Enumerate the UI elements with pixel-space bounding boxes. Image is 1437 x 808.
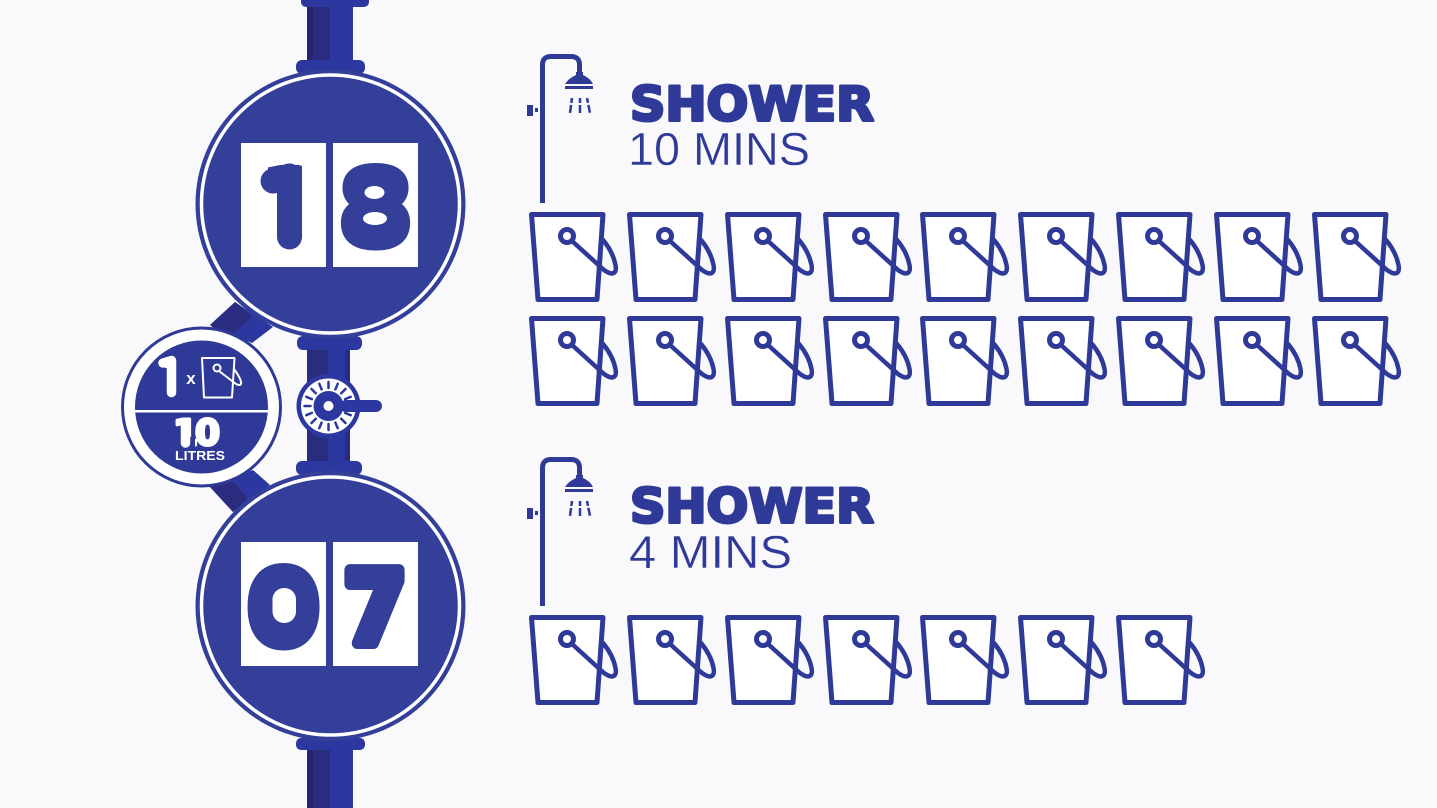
text: 10: 10 <box>173 413 219 454</box>
heading: shower 10 mins: SHOWER <box>630 78 874 132</box>
heading: shower 4 mins: SHOWER <box>630 480 874 534</box>
digit 7: 7 <box>344 552 406 667</box>
digit 1 <box>158 356 176 398</box>
text: litres: LITRES <box>175 448 225 463</box>
icon: shower head 4 mins <box>527 460 593 606</box>
panel: counter 07 <box>196 471 466 741</box>
chart: 7 buckets <box>532 618 1203 702</box>
digit 8: 8 <box>341 150 410 267</box>
panel: bucket equals 10 litres <box>121 326 282 488</box>
digit 1: 1 <box>252 151 322 268</box>
duration: 4 MINS <box>629 526 792 578</box>
multiply sign: x <box>186 369 196 388</box>
digit 1 <box>260 164 302 250</box>
heading: shower 4 mins <box>629 480 874 578</box>
pipe: diagonal lower connector <box>210 470 270 512</box>
text: 10 <box>176 417 220 448</box>
pipe: top vertical <box>296 0 369 74</box>
digit 1: 1 <box>157 352 183 405</box>
icon: shower head 10 mins <box>527 56 593 203</box>
pipe: bottom vertical <box>296 738 365 808</box>
duration: 10 MINS <box>628 123 810 175</box>
digit 0: 0 <box>249 550 318 667</box>
pipe: middle vertical <box>296 336 362 475</box>
icon: valve <box>296 374 382 438</box>
pipe: diagonal upper connector <box>210 302 273 343</box>
chart: 18 buckets <box>532 214 1399 404</box>
icon: small bucket <box>202 358 241 398</box>
heading: shower 10 mins <box>628 78 874 175</box>
panel: counter 18 <box>196 69 466 339</box>
